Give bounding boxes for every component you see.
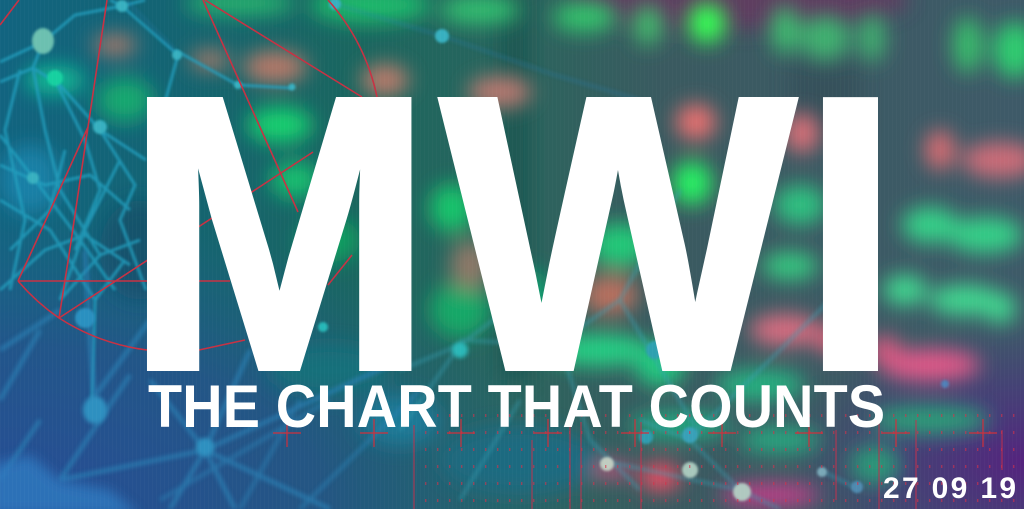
red dot grid — [420, 406, 1024, 509]
title: MWI: M — [124, 15, 434, 452]
title: MWI: W — [440, 15, 800, 452]
date: 27 09 19 — [883, 472, 1016, 505]
red crosshair markers — [273, 419, 997, 447]
title: MWI: I — [797, 11, 904, 456]
red geometric wireframe — [0, 0, 377, 350]
subtitle: THE CHART THAT COUNTS — [148, 374, 885, 440]
red vertical tick lines — [414, 420, 1002, 509]
title: MWI — [124, 11, 904, 456]
